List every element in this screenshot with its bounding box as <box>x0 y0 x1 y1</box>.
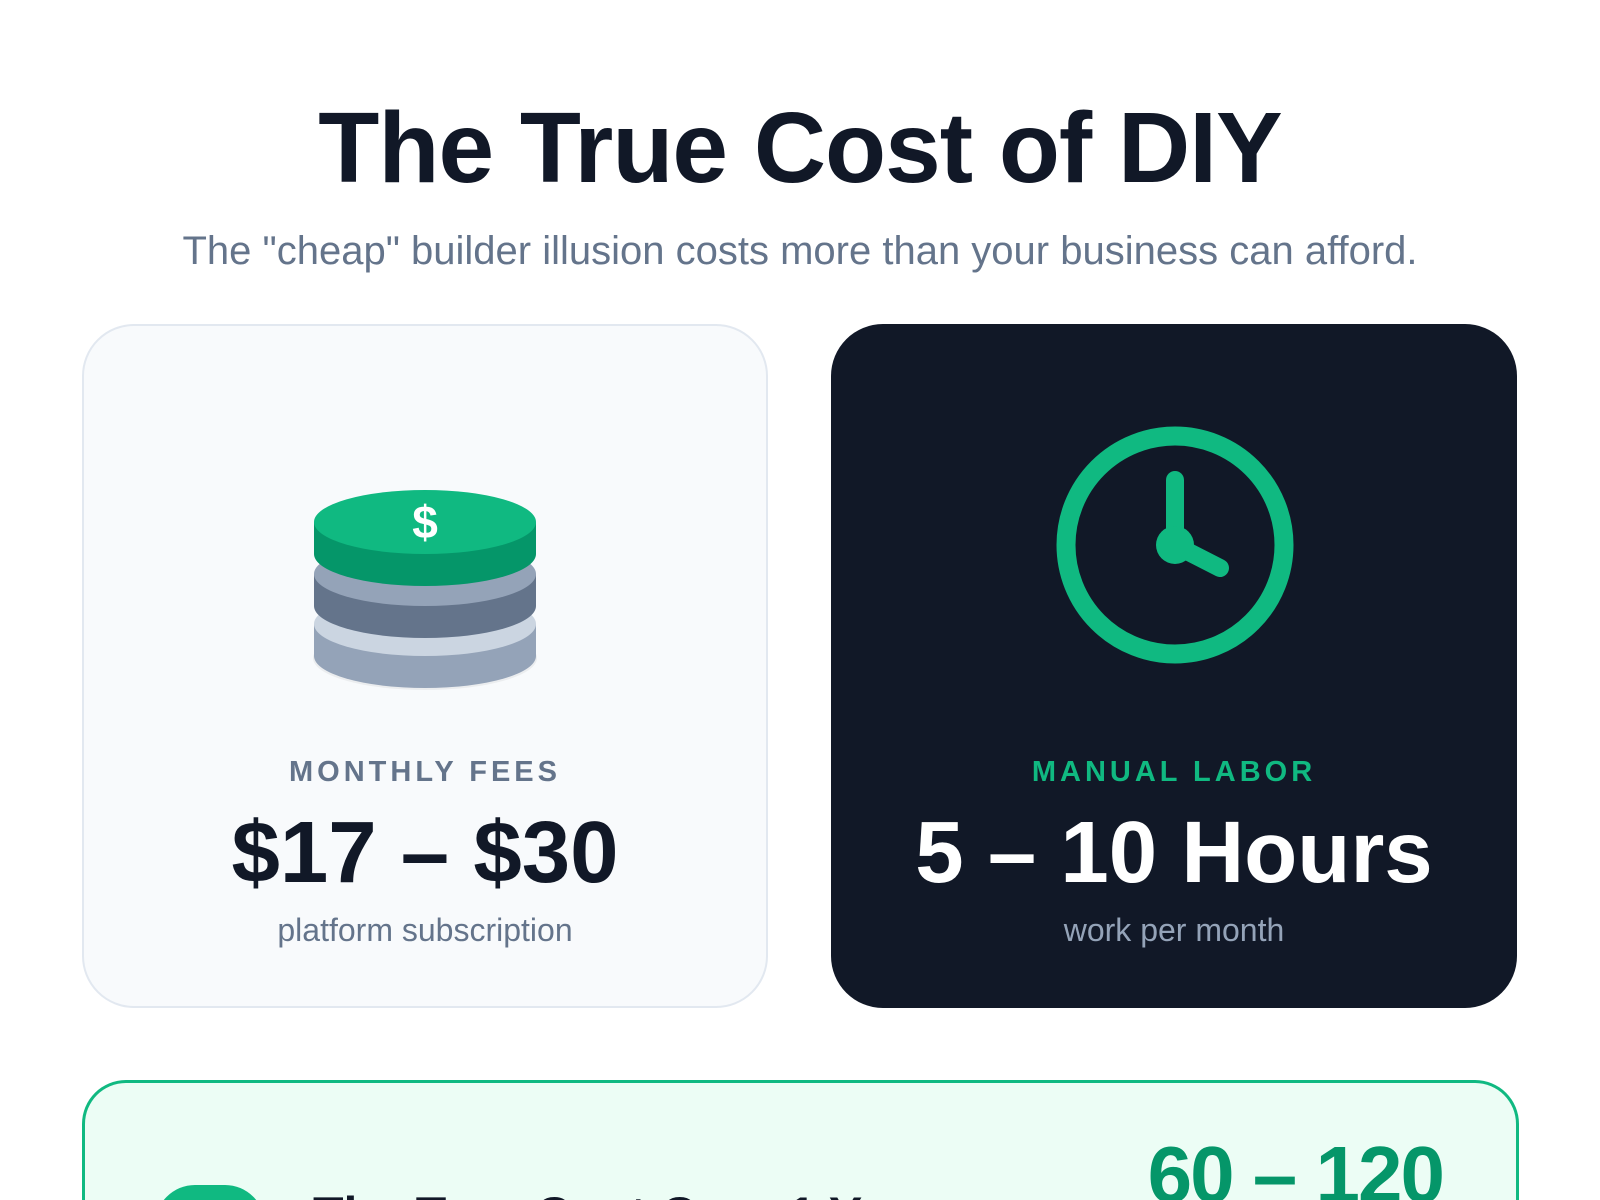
panel: true cost summary <box>82 1080 1519 1200</box>
subtitle: The "cheap" builder illusion costs more than your business can afford. <box>182 229 1418 273</box>
caption: platform subscription: platform subscription <box>277 912 573 948</box>
panel: manual labor <box>831 324 1517 1008</box>
caption: work per month: work per month <box>1064 912 1284 948</box>
icon: green badge <box>164 1185 256 1200</box>
label: manual labor: MANUAL LABOR <box>1032 756 1316 788</box>
value: fees: $17 – $30 <box>231 804 619 901</box>
icon: coin stack: $ <box>412 496 438 548</box>
label: monthly fees: MONTHLY FEES <box>289 756 561 788</box>
icon: coin stack <box>313 490 537 690</box>
panel: monthly fees <box>82 324 768 1008</box>
title: The True Cost of DIY <box>318 92 1282 204</box>
icon: clock <box>1056 426 1294 664</box>
value: hours: 5 – 10 Hours <box>915 804 1433 901</box>
